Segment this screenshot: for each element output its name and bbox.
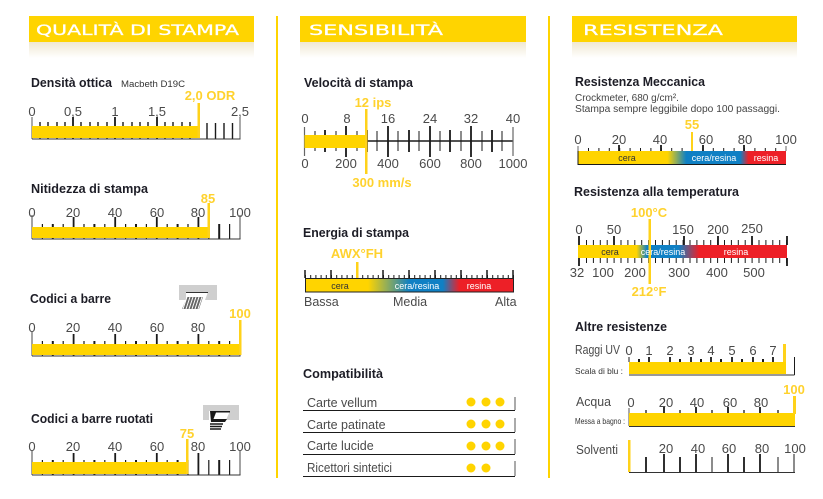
acqua: 100 xyxy=(783,382,805,397)
velocità di stampa xyxy=(301,75,527,190)
nitidezza di stampa: 40 xyxy=(108,205,122,220)
resistenza alla temperatura: resina xyxy=(724,247,748,257)
panel: resistenza xyxy=(570,16,806,473)
resistenza alla temperatura xyxy=(570,184,787,299)
resistenza alla temperatura: 300 xyxy=(668,265,690,280)
panel: qualità di stampa xyxy=(28,16,254,476)
resistenza meccanica: Resistenza Meccanica xyxy=(575,74,706,89)
compatibilità: Compatibilità xyxy=(303,366,384,381)
velocità di stampa: 0 xyxy=(301,156,309,171)
heading: sensibilità xyxy=(300,16,526,58)
heading: qualità di stampa xyxy=(29,16,254,58)
velocità di stampa: 12 ips xyxy=(355,95,391,110)
resistenza alla temperatura: 200 xyxy=(707,222,729,237)
raggi uv: 6 xyxy=(749,343,757,358)
resistenza meccanica: 100 xyxy=(775,132,797,147)
energia di stampa: cera/resina xyxy=(395,281,439,291)
altre resistenze: Altre resistenze xyxy=(575,319,667,334)
compatibilità: Carte patinate xyxy=(307,418,386,432)
resistenza meccanica: Crockmeter, 680 g/cm². xyxy=(575,93,679,104)
solventi: 20 xyxy=(659,441,673,456)
raggi uv xyxy=(575,343,794,376)
resistenza alla temperatura: 100°C xyxy=(631,205,668,220)
codici a barre xyxy=(28,285,251,356)
nitidezza di stampa: 0 xyxy=(28,205,36,220)
velocità di stampa: 24 xyxy=(423,111,437,126)
panel divider right xyxy=(548,16,550,478)
icon: stampante codici a barre xyxy=(179,285,217,309)
nitidezza di stampa: 20 xyxy=(66,205,80,220)
densità ottica: Macbeth D19C xyxy=(121,79,186,89)
compatibilità: Carte vellum xyxy=(307,396,377,410)
nitidezza di stampa: Nitidezza di stampa xyxy=(31,181,149,196)
raggi uv: 2 xyxy=(666,343,674,358)
codici a barre: 40 xyxy=(108,320,122,335)
resistenza meccanica: cera xyxy=(618,153,636,163)
codici a barre: Codici a barre xyxy=(30,291,111,306)
nitidezza di stampa: 60 xyxy=(150,205,164,220)
heading: qualità di stampa: QUALITÀ DI STAMPA xyxy=(36,22,240,39)
densità ottica: 2,0 ODR xyxy=(185,88,236,103)
resistenza alla temperatura: 50 xyxy=(607,222,621,237)
resistenza alla temperatura: 0 xyxy=(575,222,583,237)
panel: sensibilità xyxy=(300,16,527,476)
energia di stampa: Bassa xyxy=(304,295,339,309)
velocità di stampa: 300 mm/s xyxy=(352,175,412,190)
acqua: Acqua xyxy=(576,395,611,409)
raggi uv: 7 xyxy=(769,343,777,358)
nitidezza di stampa xyxy=(28,181,251,240)
velocità di stampa: 32 xyxy=(464,111,478,126)
resistenza meccanica: 60 xyxy=(699,132,713,147)
raggi uv: Scala di blu : xyxy=(575,366,623,376)
resistenza meccanica: 20 xyxy=(612,132,626,147)
raggi uv: 0 xyxy=(625,343,633,358)
raggi uv: 3 xyxy=(687,343,695,358)
codici a barre: 0 xyxy=(28,320,36,335)
resistenza meccanica: resina xyxy=(754,153,778,163)
panel divider left xyxy=(276,16,278,478)
resistenza alla temperatura: 212°F xyxy=(632,284,666,299)
resistenza alla temperatura: 200 xyxy=(624,265,646,280)
resistenza alla temperatura: 400 xyxy=(706,265,728,280)
acqua: 0 xyxy=(627,395,635,410)
codici a barre: 20 xyxy=(66,320,80,335)
heading: resistenza: RESISTENZA xyxy=(583,23,724,39)
acqua: 40 xyxy=(690,395,704,410)
compatibilità: Carte lucide xyxy=(307,439,374,453)
solventi: 100 xyxy=(784,441,806,456)
solventi: Solventi xyxy=(576,443,618,457)
raggi uv: 4 xyxy=(707,343,715,358)
resistenza alla temperatura: 100 xyxy=(592,265,614,280)
resistenza meccanica: cera/resina xyxy=(692,153,736,163)
resistenza alla temperatura: 250 xyxy=(741,221,763,236)
codici a barre ruotati: 40 xyxy=(108,439,122,454)
codici a barre: 100 xyxy=(229,306,251,321)
altre resistenze xyxy=(575,319,806,473)
solventi xyxy=(576,440,806,473)
solventi: 80 xyxy=(755,441,769,456)
solventi: 60 xyxy=(722,441,736,456)
solventi: 40 xyxy=(691,441,705,456)
densità ottica: 1 xyxy=(111,104,119,119)
resistenza alla temperatura: 500 xyxy=(743,265,765,280)
heading: sensibilità: SENSIBILITÀ xyxy=(309,22,444,39)
resistenza alla temperatura: 150 xyxy=(672,222,694,237)
raggi uv: 1 xyxy=(645,343,653,358)
acqua: 80 xyxy=(754,395,768,410)
velocità di stampa: 400 xyxy=(377,156,399,171)
acqua xyxy=(575,382,805,427)
densità ottica: 0 xyxy=(28,104,36,119)
compatibilità xyxy=(303,366,515,476)
resistenza alla temperatura: cera xyxy=(601,247,619,257)
resistenza meccanica: 80 xyxy=(738,132,752,147)
codici a barre ruotati: 20 xyxy=(66,439,80,454)
velocità di stampa: 200 xyxy=(335,156,357,171)
velocità di stampa: 8 xyxy=(343,111,351,126)
codici a barre: 60 xyxy=(150,320,164,335)
densità ottica: 1,5 xyxy=(148,104,166,119)
velocità di stampa: 1000 xyxy=(499,156,527,171)
nitidezza di stampa: 80 xyxy=(191,205,205,220)
icon: stampante codici ruotati xyxy=(203,405,239,429)
heading: resistenza xyxy=(572,16,797,58)
codici a barre ruotati: 0 xyxy=(28,439,36,454)
densità ottica: 2,5 xyxy=(231,104,249,119)
energia di stampa: AWX°FH xyxy=(331,246,383,261)
raggi uv: Raggi UV xyxy=(575,343,621,357)
resistenza alla temperatura: 32 xyxy=(570,265,584,280)
resistenza meccanica: 55 xyxy=(685,117,699,132)
energia di stampa: resina xyxy=(467,281,491,291)
velocità di stampa: 40 xyxy=(506,111,520,126)
acqua: 60 xyxy=(723,395,737,410)
codici a barre ruotati: 60 xyxy=(150,439,164,454)
velocità di stampa: Velocità di stampa xyxy=(304,75,414,90)
raggi uv: 5 xyxy=(728,343,736,358)
energia di stampa: cera xyxy=(331,281,349,291)
densità ottica: Densità ottica xyxy=(31,75,113,90)
codici a barre ruotati: 75 xyxy=(180,426,194,441)
codici a barre ruotati: Codici a barre ruotati xyxy=(31,411,153,426)
energia di stampa: Energia di stampa xyxy=(303,225,410,240)
velocità di stampa: 600 xyxy=(419,156,441,171)
velocità di stampa: 16 xyxy=(381,111,395,126)
resistenza alla temperatura: Resistenza alla temperatura xyxy=(574,184,740,199)
acqua: Messa a bagno : xyxy=(575,416,625,426)
energia di stampa: Alta xyxy=(495,295,517,309)
resistenza meccanica: Stampa sempre leggibile dopo 100 passaggi. xyxy=(575,104,780,115)
densità ottica xyxy=(28,75,249,140)
densità ottica: 0,5 xyxy=(64,104,82,119)
nitidezza di stampa: 100 xyxy=(229,205,251,220)
resistenza meccanica xyxy=(574,74,797,164)
energia di stampa: Media xyxy=(393,295,427,309)
resistenza meccanica: 40 xyxy=(653,132,667,147)
velocità di stampa: 800 xyxy=(460,156,482,171)
energia di stampa xyxy=(303,225,517,309)
resistenza meccanica: 0 xyxy=(574,132,582,147)
acqua: 20 xyxy=(659,395,673,410)
codici a barre: 80 xyxy=(191,320,205,335)
codici a barre ruotati: 80 xyxy=(191,439,205,454)
codici a barre ruotati: 100 xyxy=(229,439,251,454)
nitidezza di stampa: 85 xyxy=(201,191,215,206)
compatibilità: Ricettori sintetici xyxy=(307,461,392,475)
codici a barre ruotati xyxy=(28,405,251,476)
resistenza alla temperatura: cera/resina xyxy=(641,247,685,257)
velocità di stampa: 0 xyxy=(301,111,309,126)
